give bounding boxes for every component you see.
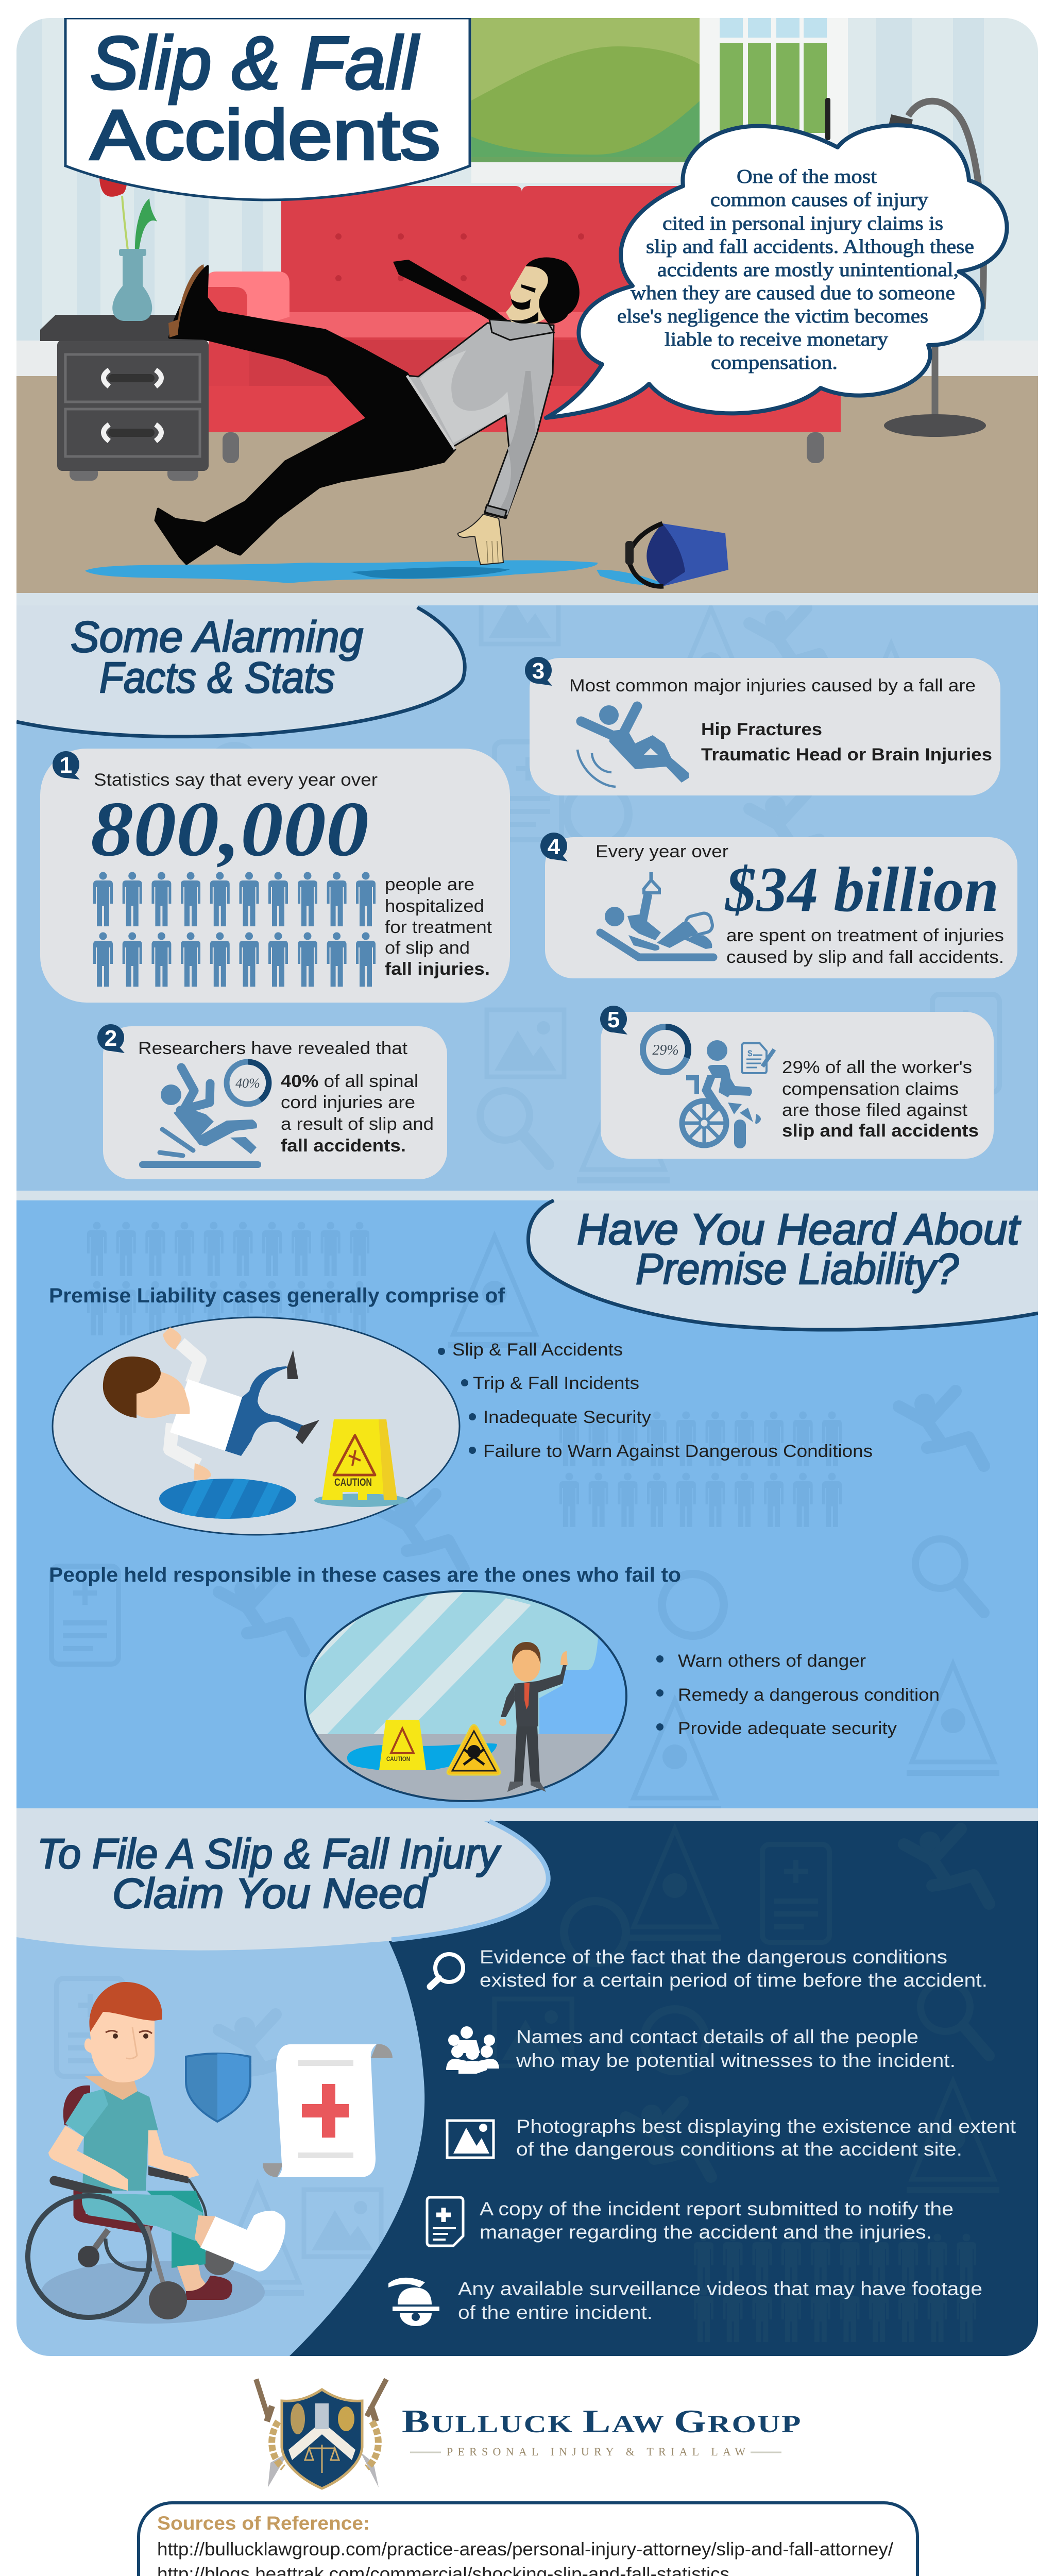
item 1: evidence: existed for a certain period of time before the accident. bbox=[480, 1970, 988, 1991]
background watermark icons bbox=[210, 577, 999, 1183]
badge 3: 3 bbox=[532, 658, 544, 684]
bullet list one: Failure to Warn Against Dangerous Conditions bbox=[483, 1442, 873, 1461]
firm name: B ULLUCK L AW G ROUP bbox=[402, 2403, 802, 2439]
item 4: incident report: manager regarding the accident and the injuries. bbox=[480, 2222, 932, 2243]
section heading: To File A Slip & Fall Injury bbox=[37, 1831, 502, 1877]
subheading two: People held responsible in these cases are the ones who fail to bbox=[49, 1564, 681, 1586]
description text: compensation claims bbox=[782, 1079, 959, 1099]
badge 3 bbox=[525, 657, 552, 686]
intro paragraph: when they are caused due to someone bbox=[631, 282, 955, 304]
item 4: incident report bbox=[427, 2197, 954, 2246]
card 5: 29 percent compensation bbox=[600, 1006, 994, 1159]
sources box bbox=[139, 2503, 917, 2576]
bullet list two: Warn others of danger bbox=[678, 1651, 866, 1671]
item 3: photographs bbox=[447, 2116, 1016, 2160]
intro paragraph: One of the most bbox=[737, 166, 877, 188]
bullet list one: Slip & Fall Accidents bbox=[452, 1340, 623, 1360]
icon: tipped bucket bbox=[625, 523, 728, 586]
item 2: witnesses: who may be potential witnesses to the incident. bbox=[516, 2050, 956, 2071]
badge 1 bbox=[53, 751, 80, 779]
description text: 40% of all spinal bbox=[281, 1072, 418, 1091]
firm tagline: PERSONAL INJURY & TRIAL LAW bbox=[447, 2445, 745, 2458]
intro paragraph: compensation. bbox=[711, 352, 838, 374]
icon: floor lamp bbox=[884, 101, 986, 437]
card 4: 34 billion bbox=[540, 833, 1017, 978]
intro paragraph: liable to receive monetary bbox=[665, 329, 888, 350]
description text: are spent on treatment of injuries bbox=[726, 926, 1004, 945]
panel: what you need to file a claim bbox=[16, 1814, 1038, 2356]
item 5: surveillance video: Any available surveillance videos that may have footage bbox=[458, 2278, 982, 2299]
badge 4: 4 bbox=[548, 834, 560, 859]
injury list: Traumatic Head or Brain Injuries bbox=[701, 745, 992, 765]
badge 5: 5 bbox=[607, 1007, 620, 1032]
big number: $34 billion bbox=[724, 854, 999, 925]
bullet list one: Inadequate Security bbox=[483, 1408, 651, 1427]
description text: are those filed against bbox=[782, 1100, 968, 1120]
intro paragraph: cited in personal injury claims is bbox=[662, 213, 943, 234]
dark content background bbox=[290, 1821, 1038, 2356]
ring chart 29 percent bbox=[643, 1027, 688, 1072]
icon: nightstand bbox=[40, 315, 209, 481]
intro paragraph: else's negligence the victim becomes bbox=[617, 306, 928, 327]
description text: of slip and bbox=[385, 938, 470, 958]
section heading bbox=[16, 605, 465, 737]
bullet list two: Provide adequate security bbox=[678, 1719, 897, 1738]
section heading: Premise Liability? bbox=[636, 1245, 959, 1293]
illustration: person falling into manhole: CAUTION bbox=[334, 1477, 372, 1488]
injury list: Hip Fractures bbox=[701, 720, 822, 739]
item 4: incident report: A copy of the incident report submitted to notify the bbox=[480, 2198, 954, 2219]
water puddle bbox=[85, 560, 662, 585]
icon: slipping person bbox=[577, 705, 689, 787]
icon: signed claim document bbox=[742, 1043, 774, 1073]
bullet list two: Remedy a dangerous condition bbox=[678, 1685, 940, 1705]
description text: slip and fall accidents bbox=[782, 1121, 979, 1141]
description text: for treatment bbox=[385, 918, 492, 937]
description text: a result of slip and bbox=[281, 1114, 434, 1134]
description text: caused by slip and fall accidents. bbox=[726, 947, 1004, 967]
section heading: Some Alarming bbox=[71, 613, 363, 661]
background watermark icons right bbox=[495, 1829, 999, 2342]
background watermark icons left bbox=[57, 1978, 556, 2296]
ring chart 40 percent: 40% bbox=[235, 1076, 260, 1091]
description text bbox=[281, 1072, 434, 1156]
bullet list one bbox=[438, 1340, 873, 1461]
icon: patient in traction bbox=[600, 872, 714, 957]
panel: premise liability bbox=[16, 1200, 1038, 1812]
icon: signed claim document: $ bbox=[747, 1048, 753, 1058]
source links: http://bullucklawgroup.com/practice-areas/personal-injury-attorney/slip-and-fall-attorney/ bbox=[157, 2538, 893, 2560]
icon: vase with tulip bbox=[99, 178, 157, 321]
title line one: Slip & Fall bbox=[90, 21, 420, 105]
big number: 800,000 bbox=[91, 786, 369, 872]
people pictogram bbox=[93, 872, 376, 987]
section heading: Have You Heard About bbox=[577, 1205, 1022, 1253]
card 3: major injuries bbox=[525, 657, 1000, 795]
bullet list one: Trip & Fall Incidents bbox=[473, 1374, 639, 1393]
badge 4 bbox=[540, 833, 568, 861]
item 2: witnesses bbox=[446, 2026, 956, 2074]
icon: red sofa bbox=[207, 186, 841, 463]
item 1: evidence: Evidence of the fact that the dangerous conditions bbox=[480, 1946, 947, 1968]
card 1: 800,000 hospitalized bbox=[40, 749, 510, 1003]
item 2: witnesses: Names and contact details of all the people bbox=[516, 2026, 918, 2047]
panel: alarming facts and stats bbox=[16, 577, 1038, 1191]
item 1: evidence bbox=[430, 1946, 988, 1991]
lead text: Researchers have revealed that bbox=[138, 1039, 408, 1058]
logo: Bulluck Law Group bbox=[256, 2379, 802, 2488]
icon: crest with swords bbox=[256, 2379, 386, 2488]
section heading bbox=[528, 1200, 1038, 1330]
speech bubble bbox=[546, 125, 1007, 418]
intro paragraph: slip and fall accidents. Although these bbox=[646, 236, 974, 258]
illustration: man warning of hazard bbox=[304, 1589, 628, 1806]
window landscape bbox=[471, 18, 848, 183]
figure: slipping man bbox=[156, 258, 580, 565]
description text: cord injuries are bbox=[281, 1093, 415, 1112]
divider band bbox=[16, 593, 1038, 605]
divider band bbox=[16, 1808, 1038, 1821]
lead text: Statistics say that every year over bbox=[94, 770, 378, 790]
ring chart 29 percent: 29% bbox=[652, 1042, 679, 1058]
description text: 29% of all the worker's bbox=[782, 1058, 972, 1077]
icon: falling person bbox=[139, 1067, 261, 1168]
description text: fall accidents. bbox=[281, 1136, 406, 1156]
description text: people are bbox=[385, 875, 474, 894]
source links bbox=[157, 2538, 893, 2576]
illustration: patient in wheelchair bbox=[28, 1982, 285, 2324]
sources heading: Sources of Reference: bbox=[157, 2513, 370, 2534]
badge 1: 1 bbox=[60, 753, 72, 778]
title line two: Accidents bbox=[90, 96, 440, 175]
item 5: surveillance video bbox=[388, 2278, 982, 2326]
description text bbox=[782, 1058, 979, 1141]
intro paragraph: accidents are mostly unintentional, bbox=[657, 259, 959, 281]
injury list bbox=[701, 720, 992, 765]
icon: shield bbox=[186, 2054, 250, 2122]
illustration: person falling into manhole bbox=[53, 1317, 460, 1535]
section heading: Claim You Need bbox=[112, 1870, 428, 1917]
description text bbox=[726, 926, 1004, 967]
intro paragraph: common causes of injury bbox=[710, 189, 928, 211]
section heading bbox=[16, 1814, 548, 1951]
icon: wheelchair user bbox=[682, 1040, 761, 1148]
card 2: 40 percent spinal bbox=[97, 1024, 447, 1179]
icon: medical scroll bbox=[263, 2044, 393, 2177]
lead text: Every year over bbox=[595, 842, 728, 861]
illustration: man warning of hazard: CAUTION bbox=[386, 1755, 410, 1762]
panel: hero room scene bbox=[16, 18, 1038, 595]
item 3: photographs: Photographs best displaying the existence and extent bbox=[516, 2116, 1016, 2137]
item 3: photographs: of the dangerous conditions at the accident site. bbox=[516, 2139, 962, 2160]
badge 2: 2 bbox=[105, 1026, 117, 1051]
description text: hospitalized bbox=[385, 896, 484, 916]
lead text: Most common major injuries caused by a fall are bbox=[569, 676, 976, 696]
item 5: surveillance video: of the entire incident. bbox=[458, 2302, 653, 2323]
bullet list two bbox=[656, 1651, 940, 1738]
divider band bbox=[16, 1191, 1038, 1200]
badge 2 bbox=[97, 1024, 125, 1053]
description text: fall injuries. bbox=[385, 959, 490, 979]
intro paragraph bbox=[617, 166, 974, 374]
description text bbox=[385, 875, 492, 979]
subheading one: Premise Liability cases generally comprise of bbox=[49, 1284, 505, 1307]
section heading: Facts & Stats bbox=[99, 653, 335, 702]
title banner bbox=[65, 18, 470, 200]
badge 5 bbox=[600, 1006, 627, 1035]
background watermark icons bbox=[52, 1222, 999, 1812]
ring chart 40 percent bbox=[227, 1062, 269, 1104]
